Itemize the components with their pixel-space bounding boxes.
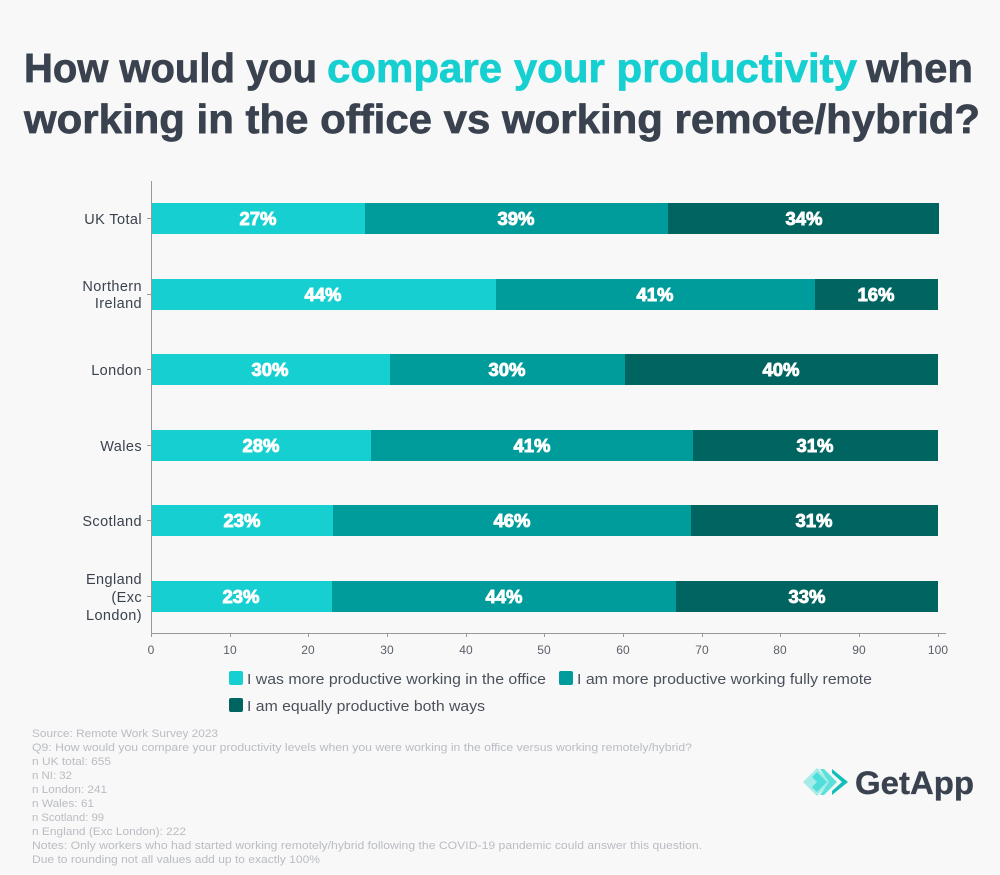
row: Scotland: 46% <box>493 510 531 531</box>
row: UK Total: 39% <box>497 208 535 229</box>
source notes: Q9: How would you compare your productivity levels when you were working in the office versus working remotely/hybrid? <box>32 742 692 754</box>
source notes: n UK total: 655 <box>32 756 111 768</box>
axis labels: 100 <box>928 643 948 657</box>
axis labels: 10 <box>223 643 237 657</box>
row: UK Total: UK Total <box>84 212 142 228</box>
logo: GetApp: GetApp <box>855 765 974 801</box>
legend <box>229 671 872 715</box>
axis labels <box>148 643 948 657</box>
source notes <box>32 728 702 866</box>
row: Northern Ireland: Ireland <box>95 296 142 312</box>
title: working in the office vs working remote/hybrid? <box>23 96 980 142</box>
row: London <box>91 354 938 385</box>
source notes: n NI: 32 <box>32 770 72 782</box>
axis labels: 20 <box>301 643 315 657</box>
axis labels: 30 <box>380 643 394 657</box>
row: Wales <box>100 430 938 461</box>
legend: I am equally productive both ways <box>247 698 485 715</box>
row: London: London <box>91 363 142 379</box>
title: How would you <box>24 45 317 91</box>
row: Scotland <box>82 505 938 536</box>
source notes: n Wales: 61 <box>32 798 94 810</box>
row: England (Exc London): London) <box>86 608 142 624</box>
source notes: Due to rounding not all values add up to exactly 100% <box>32 854 320 866</box>
stacked bar chart <box>82 181 948 657</box>
row: England (Exc London): 23% <box>222 586 260 607</box>
source notes: Source: Remote Work Survey 2023 <box>32 728 218 740</box>
source notes: n England (Exc London): 222 <box>32 826 186 838</box>
row: UK Total <box>84 203 939 234</box>
axis labels: 0 <box>148 643 155 657</box>
axis labels: 90 <box>852 643 866 657</box>
row: Northern Ireland: Northern <box>82 279 142 295</box>
row: UK Total: 27% <box>239 208 277 229</box>
row: Northern Ireland: 41% <box>636 284 674 305</box>
axes <box>147 181 946 637</box>
title: when <box>865 45 973 91</box>
axis labels: 60 <box>616 643 630 657</box>
row: Northern Ireland: 44% <box>304 284 342 305</box>
row: London: 30% <box>251 359 289 380</box>
row: England (Exc London): 44% <box>485 586 523 607</box>
row: England (Exc London): (Exc <box>111 590 142 606</box>
row: England (Exc London): 33% <box>788 586 826 607</box>
row: Scotland: Scotland <box>82 514 142 530</box>
axis labels: 40 <box>459 643 473 657</box>
row: Northern Ireland: 16% <box>857 284 895 305</box>
source notes: n London: 241 <box>32 784 107 796</box>
axis labels: 80 <box>773 643 787 657</box>
legend: I was more productive working in the office <box>247 671 546 688</box>
row: Wales: Wales <box>100 439 142 455</box>
row: Scotland: 23% <box>223 510 261 531</box>
row: London: 40% <box>762 359 800 380</box>
row: Northern Ireland <box>82 279 938 312</box>
legend: I am more productive working fully remote <box>577 671 872 688</box>
row: UK Total: 34% <box>785 208 823 229</box>
axis labels: 50 <box>537 643 551 657</box>
row: Scotland: 31% <box>795 510 833 531</box>
row: Wales: 28% <box>242 435 280 456</box>
logo: GetApp <box>803 765 974 801</box>
title: compare your productivity <box>327 45 857 91</box>
source notes: n Scotland: 99 <box>32 812 104 824</box>
row: England (Exc London) <box>86 572 938 624</box>
axis labels: 70 <box>695 643 709 657</box>
source notes: Notes: Only workers who had started working remotely/hybrid following the COVID-19 pandemic could answer this question. <box>32 840 702 852</box>
title <box>23 45 980 142</box>
row: London: 30% <box>488 359 526 380</box>
row: Wales: 31% <box>796 435 834 456</box>
row: England (Exc London): England <box>86 572 142 588</box>
row: Wales: 41% <box>513 435 551 456</box>
